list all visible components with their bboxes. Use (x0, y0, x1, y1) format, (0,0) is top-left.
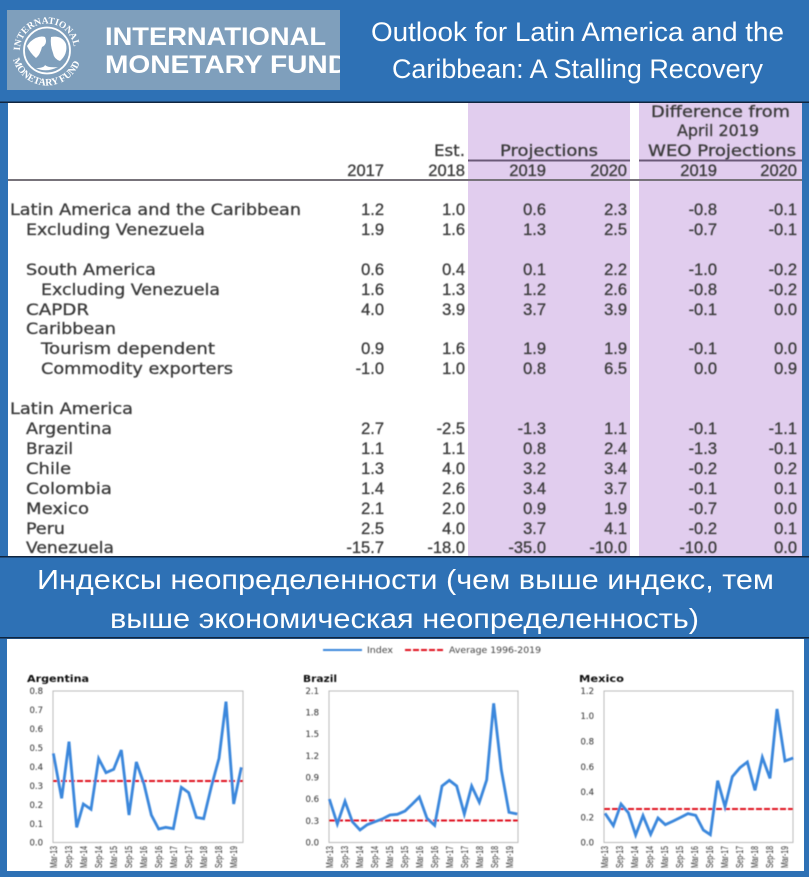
row: Excluding Venezuela: 1.9 (361, 221, 384, 239)
row: Venezuela: Venezuela (26, 538, 114, 557)
chart: Mexico: Sep-17 (734, 846, 746, 868)
chart: Mexico: 1.0 (580, 712, 594, 722)
row: Mexico: 2.0 (442, 500, 465, 518)
row: Mexico (26, 499, 797, 518)
row: Venezuela: -15.7 (346, 539, 384, 557)
chart: Mexico: 0.0 (580, 838, 594, 848)
row: Excluding Venezuela: 1.6 (442, 221, 465, 239)
chart: Mexico: 1.2 (580, 687, 594, 697)
chart: Argentina: Mar-18 (198, 846, 210, 868)
chart: Brazil: Mar-19 (504, 846, 516, 868)
table column headers: April 2019 (677, 121, 759, 140)
row: Argentina: -1.3 (518, 420, 546, 438)
row: Mexico: 0.9 (523, 500, 546, 518)
chart: Argentina: 0.3 (29, 782, 43, 792)
row: Colombia: Colombia (26, 479, 112, 498)
table column headers: 2018 (428, 162, 465, 180)
row: CAPDR: 3.7 (523, 301, 546, 319)
row: South America excluding Venezuela: -0.2 (769, 281, 797, 299)
row: Peru (26, 519, 797, 538)
row: South America excluding Venezuela: -0.8 (689, 281, 717, 299)
row: CAPDR: 4.0 (361, 301, 384, 319)
table column headers: 2019 (680, 162, 717, 180)
table column headers: Est. (434, 141, 465, 160)
chart: Argentina: 0.7 (29, 706, 43, 716)
chart: Argentina: Sep-16 (153, 846, 165, 868)
row: South America: 2.2 (604, 261, 627, 279)
panel: growth projections table (0, 102, 809, 558)
row: Chile: 4.0 (442, 460, 465, 478)
chart: Argentina: Sep-18 (213, 846, 225, 868)
chart: Argentina: Mar-17 (168, 846, 180, 868)
chart: Argentina: Mar-19 (228, 846, 240, 868)
row: Commodity exporters: 6.5 (604, 360, 627, 378)
row: Brazil: -0.1 (769, 440, 797, 458)
chart: Brazil: 1.5 (305, 730, 319, 740)
row: Mexico: 1.9 (604, 500, 627, 518)
row: Brazil: 1.1 (442, 440, 465, 458)
chart: Argentina: 0.1 (29, 820, 43, 830)
row: Venezuela: -18.0 (427, 539, 465, 557)
row: Chile: -0.2 (689, 460, 717, 478)
chart: Argentina: Argentina (27, 674, 89, 685)
chart legend: Index (367, 646, 393, 656)
chart: Argentina: Sep-13 (63, 846, 75, 868)
chart: Argentina: 0.6 (29, 725, 43, 735)
row: Excluding Venezuela (26, 220, 797, 239)
table column headers: Difference from (651, 102, 790, 121)
row: Excluding Venezuela: -0.7 (689, 221, 717, 239)
table column headers: 2020 (760, 162, 797, 180)
chart: Argentina: Mar-14 (78, 846, 90, 868)
row: Mexico: 0.0 (774, 500, 797, 518)
row: Latin America and the Caribbean: Latin America and the Caribbean (10, 200, 301, 219)
row: Commodity exporters: 0.0 (694, 360, 717, 378)
row: Chile: 0.2 (774, 460, 797, 478)
row: Argentina: 1.1 (604, 420, 627, 438)
row: South America (26, 260, 797, 279)
chart: Mexico: Mar-13 (599, 846, 611, 868)
row: CAPDR (26, 300, 797, 319)
chart: Brazil: Sep-14 (369, 846, 381, 868)
chart: Brazil: 1.2 (305, 752, 319, 762)
table column headers: 2017 (347, 162, 384, 180)
chart: Mexico: 0.6 (580, 763, 594, 773)
chart: Argentina: 0.4 (29, 763, 43, 773)
row: South America excluding Venezuela: Excluding Venezuela (41, 280, 220, 299)
row: Venezuela: -10.0 (679, 539, 717, 557)
row: Venezuela: 0.0 (774, 539, 797, 557)
chart: Brazil: Sep-13 (339, 846, 351, 868)
row: South America excluding Venezuela: 2.6 (604, 281, 627, 299)
row: Caribbean: Caribbean (26, 319, 116, 338)
row: Argentina: -1.1 (769, 420, 797, 438)
row: Brazil: Brazil (26, 439, 73, 458)
table column headers (347, 102, 797, 180)
logo wordmark: MONETARY FUND (105, 51, 348, 79)
row: Peru: 4.1 (604, 520, 627, 538)
row: Brazil: 2.4 (604, 440, 627, 458)
row: Excluding Venezuela: Excluding Venezuela (26, 220, 205, 239)
chart: Mexico: Mar-16 (689, 846, 701, 868)
chart: Brazil: 0.9 (305, 774, 319, 784)
chart: Mexico: Sep-16 (704, 846, 716, 868)
row: Commodity exporters: 0.9 (774, 360, 797, 378)
chart: Brazil: Sep-15 (399, 846, 411, 868)
heading: uncertainty indexes: Индексы неопределенности (чем выше индекс, тем (37, 564, 774, 595)
chart: Brazil: 2.1 (305, 687, 319, 697)
row: Venezuela (26, 538, 797, 557)
row: Tourism dependent: 1.9 (523, 340, 546, 358)
chart: Mexico: Sep-15 (674, 846, 686, 868)
row: Commodity exporters: -1.0 (356, 360, 384, 378)
title: Caribbean: A Stalling Recovery (392, 54, 764, 84)
chart: Mexico: 0.4 (580, 788, 594, 798)
row: Tourism dependent: -0.1 (689, 340, 717, 358)
chart: Mexico: Sep-14 (644, 846, 656, 868)
icon: IMF seal (13, 17, 80, 86)
row: South America: 0.1 (523, 261, 546, 279)
chart: Brazil: 0.0 (305, 838, 319, 848)
logo wordmark (105, 23, 348, 79)
chart: Brazil: Mar-14 (354, 846, 366, 868)
chart: Argentina: Mar-13 (48, 846, 60, 868)
chart: Mexico: 0.2 (580, 814, 594, 824)
chart: Brazil: Mar-18 (474, 846, 486, 868)
row: South America excluding Venezuela: 1.6 (361, 281, 384, 299)
row: Tourism dependent (40, 339, 797, 358)
row: Latin America: Latin America (10, 399, 133, 418)
chart: Brazil: 0.3 (305, 817, 319, 827)
row: Argentina (26, 419, 797, 438)
row: Peru: -0.2 (689, 520, 717, 538)
row: Tourism dependent: 1.9 (604, 340, 627, 358)
chart: Brazil (303, 674, 518, 868)
row: Mexico: 2.1 (361, 500, 384, 518)
row: Venezuela: -10.0 (589, 539, 627, 557)
row: Chile: Chile (26, 459, 71, 478)
chart legend (323, 646, 541, 656)
row: Colombia: 0.1 (774, 480, 797, 498)
heading: uncertainty indexes (37, 564, 774, 634)
chart: Brazil: Sep-16 (429, 846, 441, 868)
row: Latin America and the Caribbean: 1.0 (442, 201, 465, 219)
row: Brazil: 1.1 (361, 440, 384, 458)
row: Latin America and the Caribbean: 1.2 (361, 201, 384, 219)
chart: Argentina: 0.0 (29, 838, 43, 848)
heading: uncertainty indexes: выше экономическая неопределенность) (110, 603, 699, 634)
row: CAPDR: 0.0 (774, 301, 797, 319)
chart: Mexico: Mar-18 (749, 846, 761, 868)
chart: Argentina: 0.8 (29, 687, 43, 697)
table column headers: 2019 (509, 162, 546, 180)
row: Chile: 3.4 (604, 460, 627, 478)
chart: Argentina: Sep-17 (183, 846, 195, 868)
row: CAPDR: 3.9 (604, 301, 627, 319)
row: Mexico: Mexico (26, 499, 89, 518)
chart: Brazil: Mar-13 (324, 846, 336, 868)
chart legend: Average 1996-2019 (449, 646, 541, 656)
row: Brazil: -1.3 (689, 440, 717, 458)
chart: Argentina: Sep-14 (93, 846, 105, 868)
row: CAPDR: -0.1 (689, 301, 717, 319)
table column headers: Projections (500, 141, 598, 160)
chart: Argentina: Sep-15 (123, 846, 135, 868)
chart: Brazil: 0.6 (305, 795, 319, 805)
chart: Argentina: Mar-15 (108, 846, 120, 868)
row: Latin America and the Caribbean (10, 200, 797, 219)
table column headers: 2020 (590, 162, 627, 180)
row: South America: -1.0 (689, 261, 717, 279)
row: Brazil (26, 439, 797, 458)
row: Colombia: -0.1 (689, 480, 717, 498)
row: Argentina: -0.1 (689, 420, 717, 438)
row: Tourism dependent: 0.0 (774, 340, 797, 358)
row: Tourism dependent: Tourism dependent (40, 339, 215, 358)
chart: Brazil: Brazil (303, 674, 337, 685)
row: CAPDR: CAPDR (26, 300, 89, 319)
chart: Mexico: Mexico (579, 674, 624, 685)
row: Brazil: 0.8 (523, 440, 546, 458)
chart: Argentina (27, 674, 243, 868)
chart: Brazil: Mar-15 (384, 846, 396, 868)
chart: Brazil: Mar-16 (414, 846, 426, 868)
chart: Argentina: 0.5 (29, 744, 43, 754)
chart: Mexico: Mar-19 (779, 846, 791, 868)
title (371, 17, 784, 84)
row: Colombia: 2.6 (442, 480, 465, 498)
row: Peru: 2.5 (361, 520, 384, 538)
chart: Mexico: Mar-15 (659, 846, 671, 868)
row: Latin America and the Caribbean: 2.3 (604, 201, 627, 219)
row: Peru: 3.7 (523, 520, 546, 538)
icon: IMF seal: INTERNATIONAL (14, 17, 80, 50)
row: Peru: 4.0 (442, 520, 465, 538)
row: Commodity exporters: Commodity exporters (41, 359, 233, 378)
chart: Mexico: Mar-14 (629, 846, 641, 868)
row: Latin America and the Caribbean: 0.6 (523, 201, 546, 219)
row: Mexico: -0.7 (689, 500, 717, 518)
chart: Mexico (579, 674, 793, 868)
row: Latin America and the Caribbean: -0.8 (689, 201, 717, 219)
row: South America excluding Venezuela (41, 280, 797, 299)
chart: Argentina: Mar-16 (138, 846, 150, 868)
row: Venezuela: -35.0 (508, 539, 546, 557)
chart: Mexico: Sep-13 (614, 846, 626, 868)
row: Chile (26, 459, 797, 478)
row: Peru: 0.1 (774, 520, 797, 538)
chart: Brazil: Mar-17 (444, 846, 456, 868)
row: Commodity exporters (41, 359, 797, 378)
title: Outlook for Latin America and the (371, 17, 784, 47)
panel: uncertainty charts (0, 637, 809, 871)
row: South America: 0.4 (442, 261, 465, 279)
chart: Brazil: 1.8 (305, 708, 319, 718)
row: Peru: Peru (26, 519, 65, 538)
row: Excluding Venezuela: -0.1 (769, 221, 797, 239)
chart: Mexico: Sep-18 (764, 846, 776, 868)
row: Excluding Venezuela: 1.3 (523, 221, 546, 239)
logo wordmark: INTERNATIONAL (105, 23, 326, 51)
row: Chile: 1.3 (361, 460, 384, 478)
header: IMF logo (7, 10, 348, 90)
row: Argentina: -2.5 (437, 420, 465, 438)
row: CAPDR: 3.9 (442, 301, 465, 319)
icon: IMF seal: MONETARY FUND (13, 57, 79, 86)
chart: Mexico: Mar-17 (719, 846, 731, 868)
chart: Brazil: Sep-18 (489, 846, 501, 868)
chart: Brazil: Sep-17 (459, 846, 471, 868)
chart: Argentina: 0.2 (29, 801, 43, 811)
row: South America excluding Venezuela: 1.3 (442, 281, 465, 299)
row: Colombia: 1.4 (361, 480, 384, 498)
row: Excluding Venezuela: 2.5 (604, 221, 627, 239)
row: Colombia: 3.4 (523, 480, 546, 498)
row: Latin America and the Caribbean: -0.1 (769, 201, 797, 219)
table column headers: WEO Projections (648, 141, 796, 160)
row: Argentina: 2.7 (361, 420, 384, 438)
row: Commodity exporters: 1.0 (442, 360, 465, 378)
row: South America: South America (26, 260, 156, 279)
row: Tourism dependent: 1.6 (442, 340, 465, 358)
row: Commodity exporters: 0.8 (523, 360, 546, 378)
chart: Mexico: 0.8 (580, 738, 594, 748)
row: Colombia (26, 479, 797, 498)
row: Argentina: Argentina (26, 419, 112, 438)
row: Tourism dependent: 0.9 (361, 340, 384, 358)
row: Chile: 3.2 (523, 460, 546, 478)
row: South America: -0.2 (769, 261, 797, 279)
row: South America: 0.6 (361, 261, 384, 279)
row: South America excluding Venezuela: 1.2 (523, 281, 546, 299)
row: Colombia: 3.7 (604, 480, 627, 498)
